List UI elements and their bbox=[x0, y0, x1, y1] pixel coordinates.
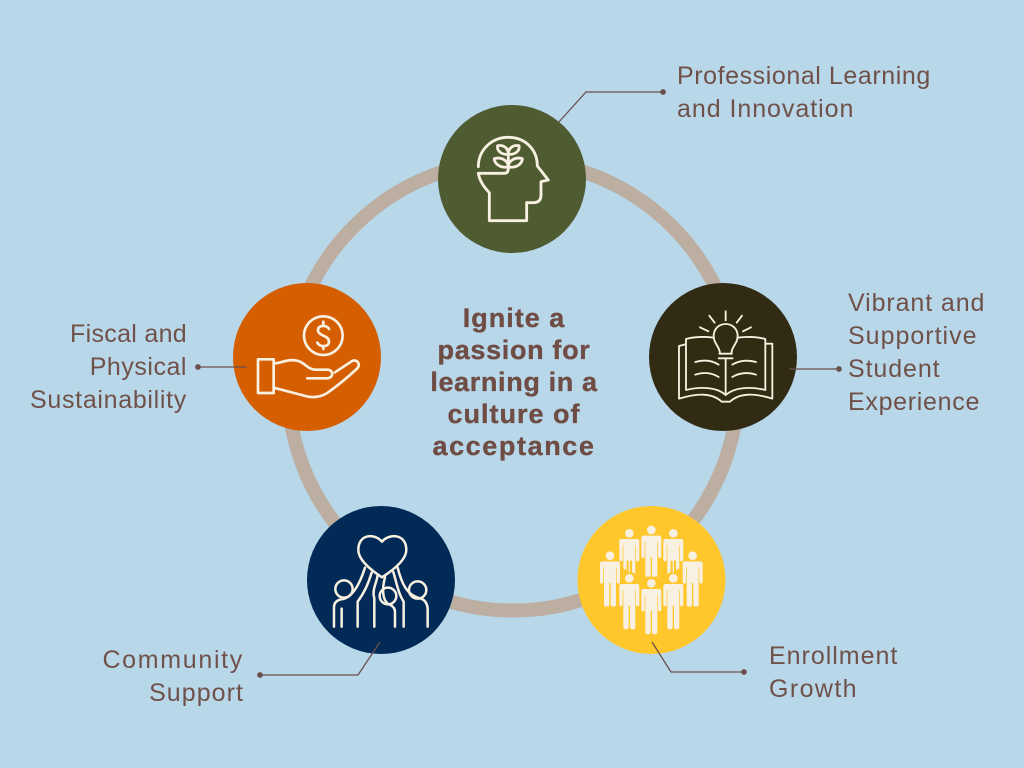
label: Vibrant and Supportive Student Experience bbox=[848, 289, 985, 416]
icon: people holding up a heart bbox=[334, 536, 428, 627]
ring connecting the circles bbox=[288, 160, 738, 610]
circle: navy community icon bbox=[307, 506, 455, 654]
label: Fiscal and Physical Sustainability bbox=[30, 320, 187, 414]
label: Enrollment Growth bbox=[769, 642, 898, 703]
label: Vibrant and Supportive Student Experience: Supportive bbox=[848, 322, 978, 350]
circle: dark brown book icon bbox=[649, 283, 797, 431]
label: Community Support: Support bbox=[149, 679, 244, 707]
person far left bbox=[600, 551, 620, 607]
icon: group of people bbox=[600, 526, 703, 634]
central statement: culture of bbox=[447, 399, 580, 429]
leader: Fiscal Sustainability bbox=[196, 365, 247, 369]
person back left bbox=[619, 529, 639, 574]
label: Vibrant and Supportive Student Experience: Student bbox=[848, 355, 940, 383]
person front left bbox=[619, 574, 639, 629]
label: Enrollment Growth: Growth bbox=[769, 675, 858, 703]
leader: Professional Learning bbox=[558, 90, 665, 123]
icon: head with sprout bbox=[478, 137, 548, 221]
label: Fiscal and Physical Sustainability: Fiscal and bbox=[70, 320, 187, 348]
label: Vibrant and Supportive Student Experience: Experience bbox=[848, 388, 980, 416]
circle: orange hand icon bbox=[233, 283, 381, 431]
label: Community Support bbox=[102, 646, 244, 707]
label: Vibrant and Supportive Student Experience: Vibrant and bbox=[848, 289, 985, 317]
circle: green head icon bbox=[438, 105, 586, 253]
label: Professional Learning and Innovation: and Innovation bbox=[677, 95, 854, 123]
person back centre bbox=[641, 526, 661, 577]
label: Fiscal and Physical Sustainability: Sustainability bbox=[30, 386, 187, 414]
leader: Student Experience bbox=[789, 367, 841, 371]
icon: hand holding coin bbox=[258, 316, 359, 397]
person front right bbox=[663, 574, 683, 629]
label: Fiscal and Physical Sustainability: Physical bbox=[90, 353, 187, 381]
central statement bbox=[430, 303, 598, 461]
label: Professional Learning and Innovation bbox=[677, 62, 931, 123]
label: Community Support: Community bbox=[102, 646, 244, 674]
central statement: acceptance bbox=[432, 431, 596, 461]
circle: yellow people icon bbox=[578, 506, 726, 654]
label: Professional Learning and Innovation: Professional Learning bbox=[677, 62, 931, 90]
person front centre bbox=[641, 579, 661, 634]
central statement: learning in a bbox=[430, 367, 598, 397]
person back right bbox=[663, 529, 683, 574]
central statement: Ignite a bbox=[463, 303, 565, 333]
icon: open book with light bulb bbox=[679, 311, 772, 402]
central statement: passion for bbox=[438, 335, 590, 365]
label: Enrollment Growth: Enrollment bbox=[769, 642, 898, 670]
leader: Enrollment Growth bbox=[652, 642, 746, 674]
leader: Community Support bbox=[258, 642, 380, 677]
person far right bbox=[683, 551, 703, 607]
